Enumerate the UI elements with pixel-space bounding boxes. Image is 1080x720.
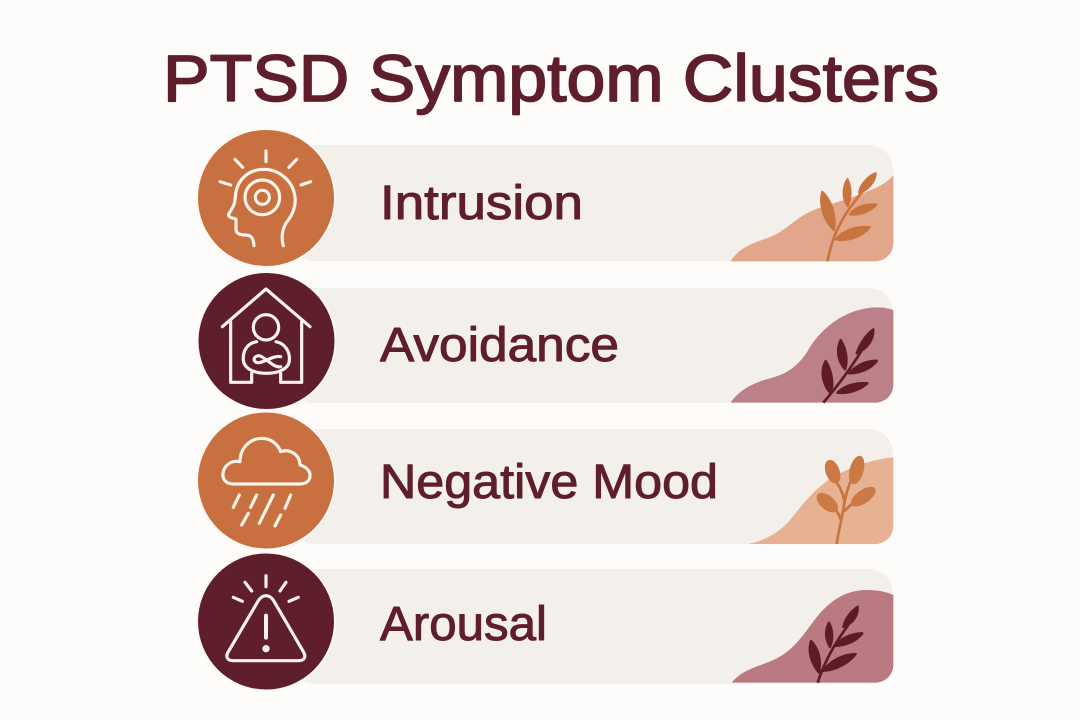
label: Negative Mood: Negative Mood	[380, 456, 718, 509]
panel background: Arousal	[290, 569, 893, 684]
decoration: mauve hill and maroon sprig	[731, 307, 893, 403]
decoration: peach hill and orange sprig	[731, 173, 893, 261]
label: Arousal: Arousal	[380, 598, 547, 651]
panel: Arousal	[290, 569, 893, 684]
panel background: Intrusion	[290, 145, 893, 261]
icon: head with target and rays	[196, 128, 336, 268]
label: Avoidance: Avoidance	[380, 319, 619, 372]
panel: Avoidance	[290, 288, 893, 403]
decoration: rose hill and maroon sprig	[732, 590, 893, 683]
icon: person with crossed arms inside house	[196, 271, 336, 411]
icon: warning triangle with rays	[196, 552, 336, 692]
label: Intrusion: Intrusion	[380, 177, 583, 230]
decoration: light peach hill and rounded sprig	[748, 454, 893, 544]
panel background: Negative Mood	[290, 429, 893, 544]
panel: Intrusion	[290, 145, 893, 261]
panel: Negative Mood	[290, 429, 893, 544]
panel background: Avoidance	[290, 288, 893, 403]
title: PTSD Symptom Clusters	[163, 41, 939, 115]
icon: rain cloud	[196, 410, 336, 550]
